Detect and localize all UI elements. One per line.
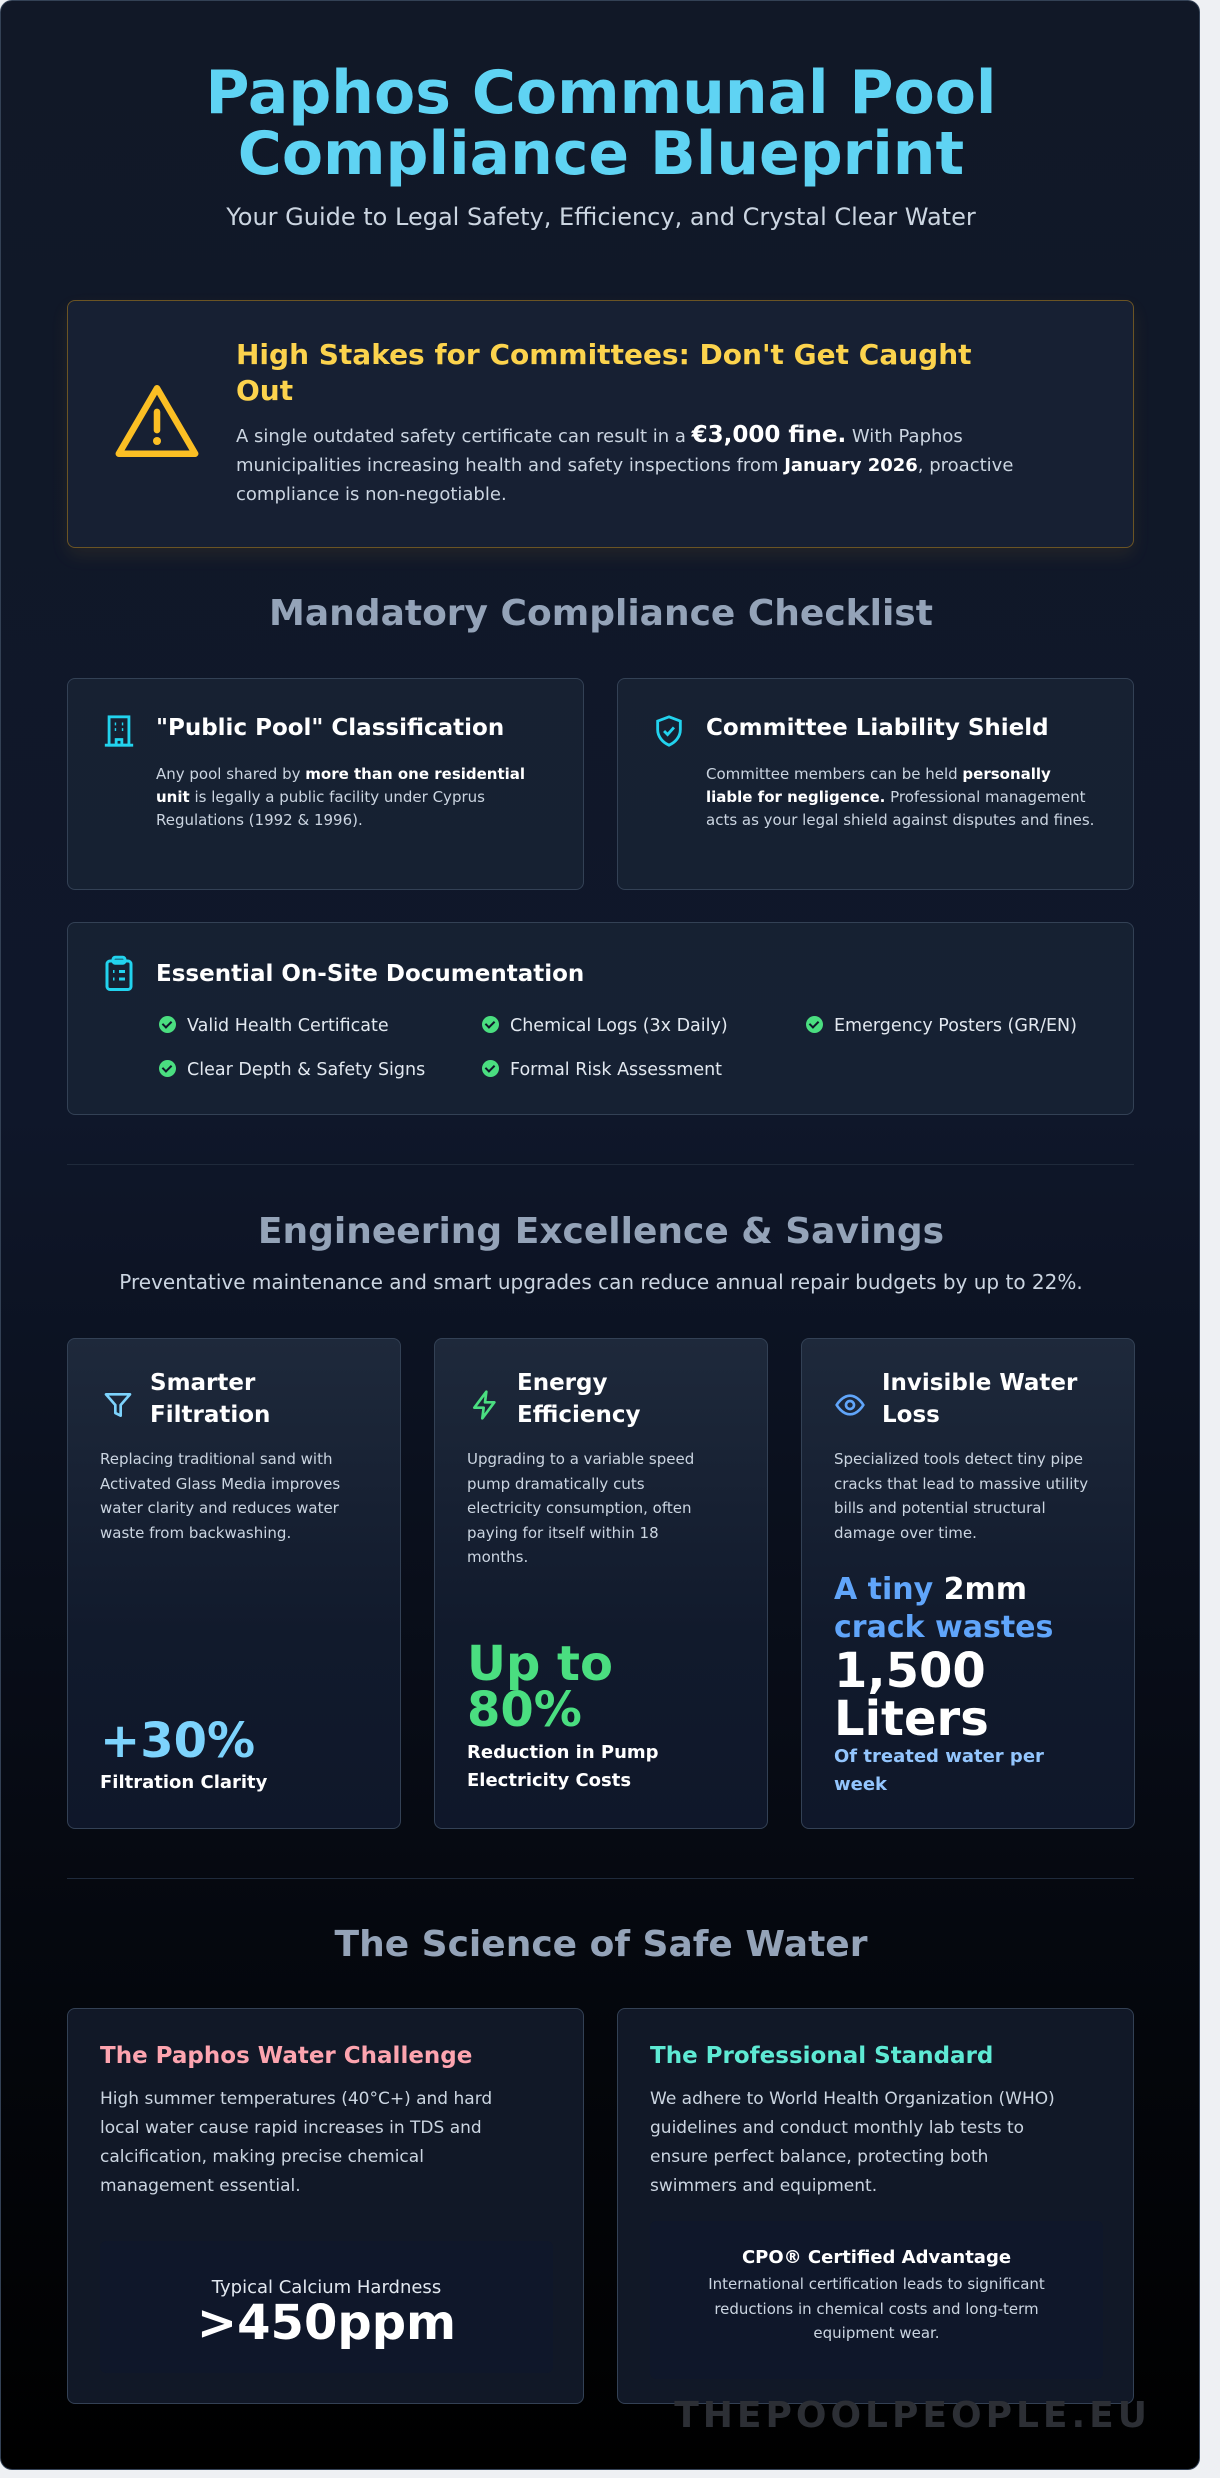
card text: High summer temperatures (40°C+) and hard local water cause rapid increases in TDS and calcification, making precise chemical management essential. — [100, 2089, 492, 2196]
panel: water loss — [801, 1338, 1135, 1829]
stat box — [100, 2241, 553, 2373]
stat: 1,500 liters — [834, 1572, 1053, 1795]
checklist items: Formal Risk Assessment — [510, 1060, 722, 1080]
subheading: Preventative maintenance and smart upgrades can reduce annual repair budgets by up to 22%. — [119, 1270, 1083, 1294]
icon: shield — [656, 715, 682, 747]
card text: Any pool shared by more than one residential unit is legally a public facility under Cyprus Regulations (1992 & 1996). — [156, 765, 525, 829]
card title: The Professional Standard — [650, 2043, 993, 2069]
stat: 80% — [467, 1636, 659, 1791]
checklist items: Valid Health Certificate — [187, 1016, 389, 1036]
stat box: >450ppm — [197, 2295, 456, 2351]
checklist items: Chemical Logs (3x Daily) — [510, 1016, 728, 1036]
panel: energy: Upgrading to a variable speed pump dramatically cuts electricity consumption, often paying for itself within 18 months. — [467, 1450, 694, 1566]
stat: +30% — [100, 1713, 267, 1793]
title: Compliance Blueprint — [238, 119, 964, 189]
stat: 1,500 liters: Of treated water per week — [834, 1746, 1044, 1795]
icon: bolt — [472, 1390, 496, 1420]
subtitle: Your Guide to Legal Safety, Efficiency, and Crystal Clear Water — [226, 203, 976, 231]
stat: 80%: Electricity Costs — [467, 1770, 631, 1791]
title — [206, 58, 996, 189]
panel: water loss: Specialized tools detect tiny pipe cracks that lead to massive utility bills and potential structural damage over time. — [834, 1450, 1088, 1542]
panel: liability — [617, 678, 1134, 890]
icon: clipboard — [106, 956, 132, 991]
stat: +30%: +30% — [100, 1713, 255, 1769]
stat: 80%: Reduction in Pump — [467, 1742, 659, 1763]
certified box: CPO® Certified Advantage — [742, 2247, 1011, 2268]
stat: +30%: Filtration Clarity — [100, 1772, 267, 1793]
panel: professional — [617, 2008, 1134, 2404]
panel: energy: Energy — [517, 1370, 607, 1396]
panel: documentation — [67, 922, 1134, 1115]
panel: challenge — [67, 2008, 584, 2404]
icon: building — [104, 715, 134, 747]
stat: 80%: 80% — [467, 1682, 582, 1738]
stat: 80%: Up to — [467, 1636, 613, 1692]
alert heading: High Stakes for Committees: Don't Get Caught Out — [236, 338, 972, 407]
icon: eye — [835, 1394, 865, 1416]
card text: We adhere to World Health Organization (WHO) guidelines and conduct monthly lab tests to ensure perfect balance, protecting both swimmers and equipment. — [650, 2089, 1055, 2196]
panel: filtration — [67, 1338, 401, 1829]
stat: 1,500 liters: A tiny 2mm crack wastes — [834, 1572, 1053, 1645]
alert panel — [67, 300, 1134, 548]
heading: engineering: Engineering Excellence & Savings — [258, 1211, 944, 1252]
panel: water loss: Loss — [882, 1402, 940, 1428]
alert text: A single outdated safety certificate can result in a €3,000 fine. With Paphos municipalities increasing health and safety inspections from January 2026, proactive compliance is non-negotiable. — [236, 422, 1013, 505]
card title: Essential On-Site Documentation — [156, 961, 584, 987]
card title: Committee Liability Shield — [706, 715, 1049, 741]
panel: filtration: Smarter — [150, 1370, 255, 1396]
icon: warning — [116, 385, 198, 457]
heading: checklist: Mandatory Compliance Checklist — [269, 593, 933, 634]
heading: science: The Science of Safe Water — [335, 1924, 867, 1965]
panel: water loss: Invisible Water — [882, 1370, 1077, 1396]
stat box: Typical Calcium Hardness — [212, 2277, 441, 2298]
card title: "Public Pool" Classification — [156, 715, 504, 741]
card title: The Paphos Water Challenge — [100, 2043, 472, 2069]
panel: filtration: Filtration — [150, 1402, 270, 1428]
icon: filter — [104, 1393, 132, 1417]
panel: public pool — [67, 678, 584, 890]
checklist items: Emergency Posters (GR/EN) — [834, 1016, 1077, 1036]
panel: energy: Efficiency — [517, 1402, 640, 1428]
checklist items: Clear Depth & Safety Signs — [187, 1060, 425, 1080]
certified box: International certification leads to significant reductions in chemical costs and long-term equipment wear. — [708, 2275, 1045, 2342]
checklist items — [159, 1016, 1077, 1080]
panel: energy — [434, 1338, 768, 1829]
stat: 1,500 liters: Liters — [834, 1691, 989, 1747]
card text: Committee members can be held personally liable for negligence. Professional management acts as your legal shield against disputes and fines. — [706, 765, 1094, 829]
watermark: THEPOOLPEOPLE.EU — [674, 2395, 1151, 2436]
certified box — [650, 2221, 1103, 2379]
title: Paphos Communal Pool — [206, 58, 996, 128]
panel: filtration: Replacing traditional sand with Activated Glass Media improves water clarity and reduces water waste from backwashing. — [100, 1450, 340, 1542]
stat: 1,500 liters: 1,500 — [834, 1643, 986, 1699]
